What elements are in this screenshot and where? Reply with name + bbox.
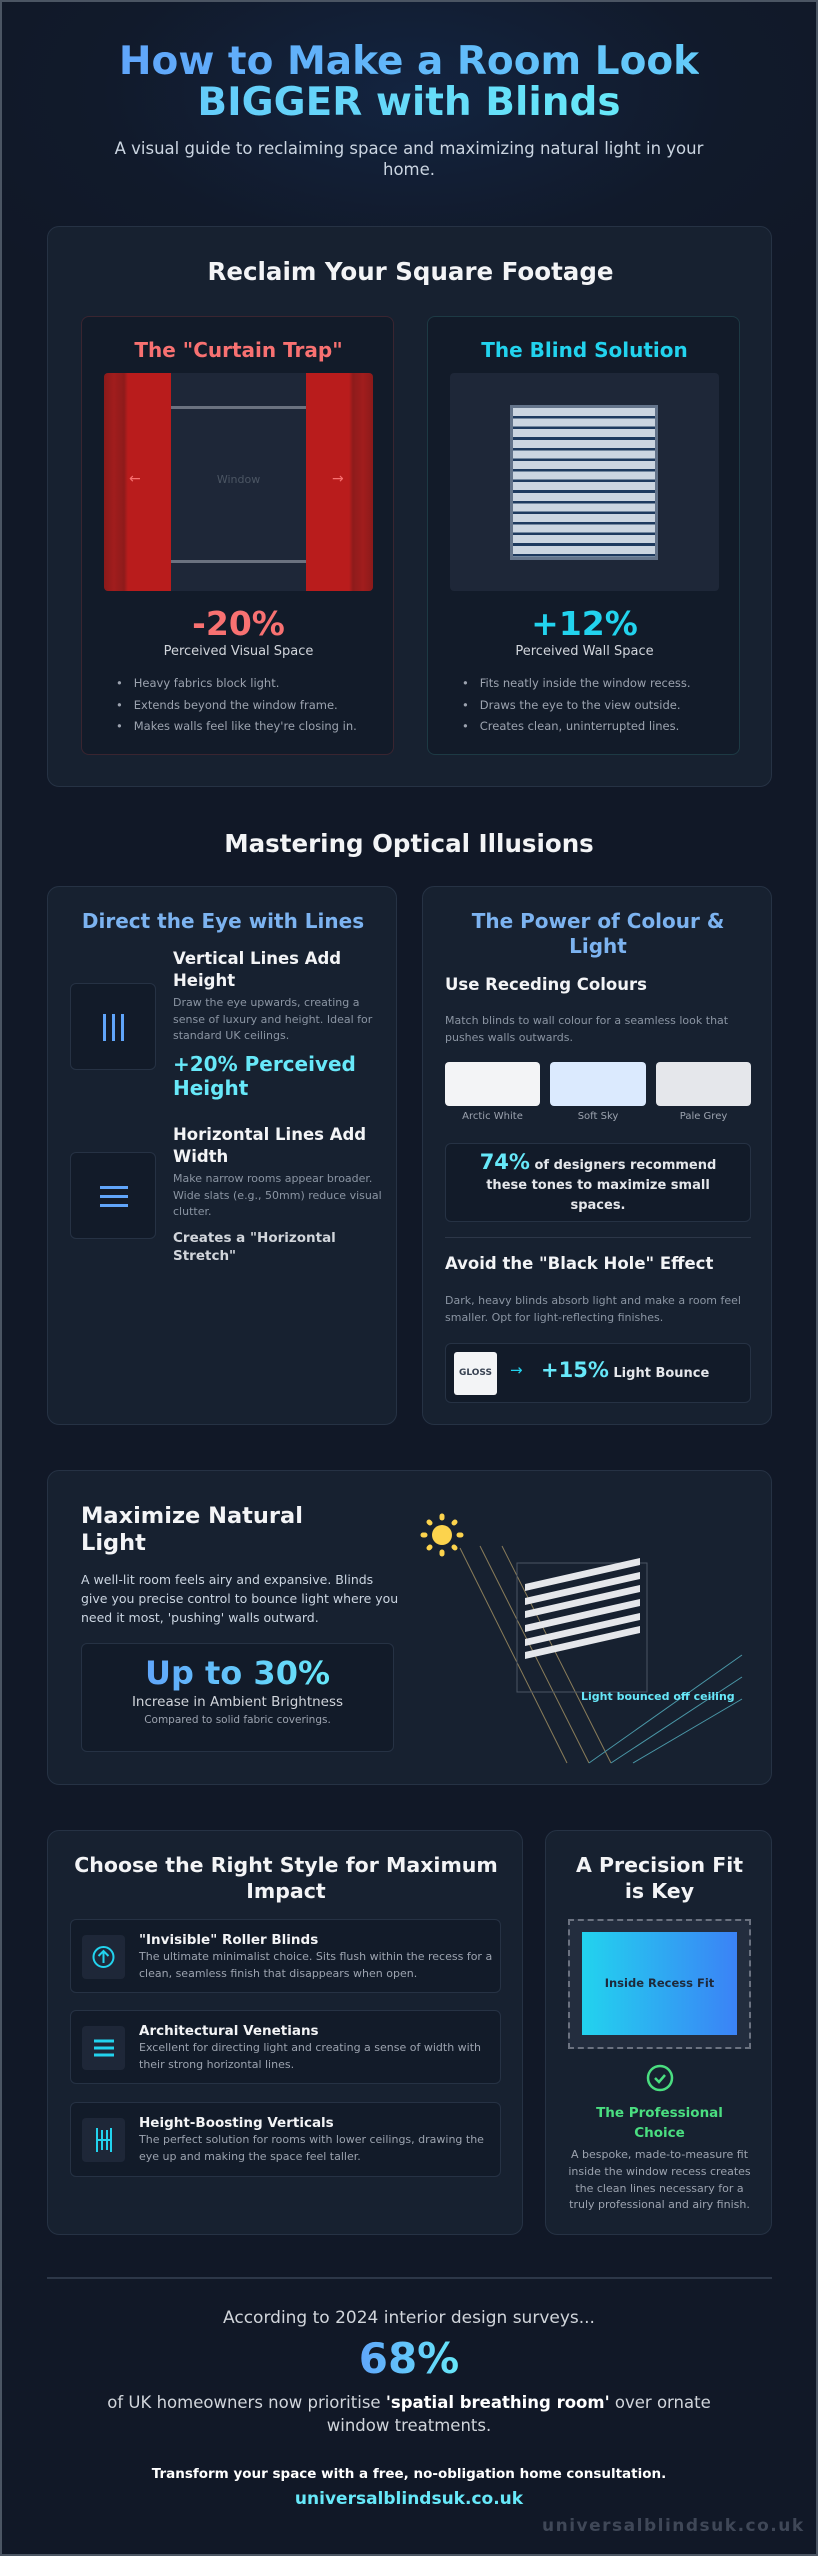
swatches: Soft Sky <box>578 1111 618 1122</box>
stat box: up to 30%: Increase in Ambient Brightness <box>132 1694 343 1710</box>
text: horizontal lines: Make narrow rooms appear broader. Wide slats (e.g., 50mm) reduce visual clutter. <box>173 1172 382 1218</box>
illustration: recess fit <box>568 1919 751 2049</box>
item: roller blinds <box>70 1919 501 1993</box>
illustration: blind <box>450 373 719 591</box>
icon: sun <box>423 1516 461 1554</box>
card: blind solution <box>427 316 740 755</box>
subtitle: A visual guide to reclaiming space and maximizing natural light in your home. <box>115 139 703 179</box>
text: vertical lines: Vertical Lines Add Height <box>173 949 341 990</box>
swatches <box>445 1062 751 1122</box>
watermark: universalblindsuk.co.uk <box>542 2516 805 2536</box>
call to action: Transform your space with a free, no-obligation home consultation. <box>152 2466 666 2482</box>
bullet list <box>462 676 691 733</box>
card title: The Blind Solution <box>481 338 688 362</box>
panel: precision fit: A bespoke, made-to-measure fit inside the window recess creates the clean lines necessary for a truly professional and airy finish. <box>568 2148 751 2211</box>
bullet list <box>116 676 357 733</box>
title <box>119 39 699 125</box>
panel: maximize natural light <box>47 1470 772 1785</box>
panel: colour and light: Match blinds to wall colour for a seamless look that pushes walls outwards. <box>445 1014 728 1044</box>
heading: mastering optical illusions: Mastering Optical Illusions <box>224 829 594 858</box>
heading: Maximize Natural <box>81 1503 303 1529</box>
icon: vertical bars <box>82 2118 125 2162</box>
bullet list: • Draws the eye to the view outside. <box>462 698 680 712</box>
bullet list: • Makes walls feel like they're closing in. <box>116 719 357 733</box>
subheading: black hole: Avoid the "Black Hole" Effect <box>445 1254 713 1273</box>
item: venetians: Excellent for directing light and creating a sense of width with their strong horizontal lines. <box>139 2041 481 2070</box>
panel: precision fit <box>545 1830 772 2235</box>
card: curtain trap <box>81 316 394 755</box>
text: vertical lines: +20% Perceived Height <box>173 1052 356 1100</box>
item: roller blinds: "Invisible" Roller Blinds <box>139 1932 318 1948</box>
icon: horizontal lines <box>82 2026 125 2070</box>
panel: colour and light <box>422 886 772 1425</box>
text: horizontal lines: Horizontal Lines Add Width <box>173 1125 366 1166</box>
stat box: up to 30%: Compared to solid fabric coverings. <box>144 1714 331 1726</box>
panel title: The Power of Colour & Light <box>472 909 724 958</box>
heading: is Key <box>625 1879 694 1903</box>
description: A well-lit room feels airy and expansive. Blinds give you precise control to bounce light where you need it most, 'pushing' walls outward. <box>81 1572 398 1625</box>
survey statement: According to 2024 interior design surveys... <box>223 2308 595 2328</box>
icon: check <box>646 2064 674 2092</box>
bullet list: • Extends beyond the window frame. <box>116 698 338 712</box>
swatches: Arctic White <box>462 1111 523 1122</box>
panel title: Direct the Eye with Lines <box>82 909 364 933</box>
swatches: Pale Grey <box>680 1111 727 1122</box>
icon: up arrow circle <box>82 1935 125 1979</box>
panel: choose the right style <box>47 1830 523 2235</box>
illustration: curtains <box>104 373 373 591</box>
stat -20%: -20% <box>192 604 285 643</box>
bullet list: • Heavy fabrics block light. <box>116 676 279 690</box>
card: curtain trap: Perceived Visual Space <box>164 644 313 659</box>
title: How to Make a Room Look <box>119 39 699 84</box>
heading: Light <box>81 1530 146 1556</box>
gloss stat: +15% Light Bounce <box>541 1358 709 1382</box>
heading: A Precision Fit <box>576 1853 743 1877</box>
title: BIGGER with Blinds <box>197 80 621 125</box>
icon: horizontal lines <box>70 1152 156 1239</box>
item: roller blinds: The ultimate minimalist choice. Sits flush within the recess for a clean, seamless finish that disappears when open. <box>139 1950 492 1980</box>
survey statement: 68% <box>359 2334 459 2383</box>
gloss stat: → <box>510 1361 523 1379</box>
stat box: 74%: 74% of designers recommend these tones to maximize small spaces. <box>480 1150 716 1213</box>
stat box: up to 30% <box>81 1643 394 1752</box>
illustration: curtains: → <box>332 471 344 487</box>
item: venetians <box>70 2010 501 2084</box>
url: universalblindsuk.co.uk <box>295 2489 523 2509</box>
stat box: up to 30%: Up to 30% <box>145 1654 330 1692</box>
gloss stat <box>445 1343 751 1403</box>
card: blind solution: Perceived Wall Space <box>515 644 654 659</box>
item: venetians: Architectural Venetians <box>139 2023 319 2039</box>
stat +12%: +12% <box>531 604 638 643</box>
gloss stat: GLOSS <box>459 1368 492 1378</box>
survey statement <box>107 2308 711 2435</box>
label: professional choice: The Professional <box>596 2105 723 2121</box>
label: professional choice: Choice <box>634 2125 685 2141</box>
heading: Choose the Right Style for Maximum Impact <box>74 1853 498 1903</box>
item: verticals: Height-Boosting Verticals <box>139 2115 334 2131</box>
label: professional choice <box>596 2105 723 2141</box>
illustration: curtains: ← <box>129 471 141 487</box>
illustration: light bounce <box>420 1514 742 1764</box>
survey statement: of UK homeowners now prioritise 'spatial breathing room' over ornate window treatments. <box>107 2393 711 2435</box>
card title: The "Curtain Trap" <box>134 338 343 362</box>
stat box: 74% <box>445 1143 751 1222</box>
bullet list: • Fits neatly inside the window recess. <box>462 676 691 690</box>
heading: reclaim: Reclaim Your Square Footage <box>208 257 613 286</box>
icon: vertical lines <box>70 983 156 1070</box>
illustration: curtains: Window <box>217 473 260 486</box>
item: verticals: The perfect solution for rooms with lower ceilings, drawing the eye up and making the space feel taller. <box>139 2133 484 2162</box>
heading <box>81 1503 303 1556</box>
text: vertical lines <box>173 949 372 1100</box>
text: horizontal lines: Creates a "Horizontal Stretch" <box>173 1230 336 1264</box>
illustration: light bounce: Light bounced off ceiling <box>581 1690 735 1703</box>
bullet list: • Creates clean, uninterrupted lines. <box>462 719 679 733</box>
heading <box>576 1853 743 1903</box>
panel: colour and light: Dark, heavy blinds absorb light and make a room feel smaller. Opt for light-reflecting finishes. <box>445 1294 741 1324</box>
text: vertical lines: Draw the eye upwards, creating a sense of luxury and height. Ideal for standard UK ceilings. <box>173 996 372 1042</box>
subheading: receding colours: Use Receding Colours <box>445 975 647 994</box>
panel: direct the eye <box>47 886 397 1425</box>
text: horizontal lines <box>173 1125 382 1264</box>
item: verticals <box>70 2102 501 2177</box>
panel: reclaim square footage <box>47 226 772 787</box>
illustration: recess fit: Inside Recess Fit <box>605 1976 714 1990</box>
